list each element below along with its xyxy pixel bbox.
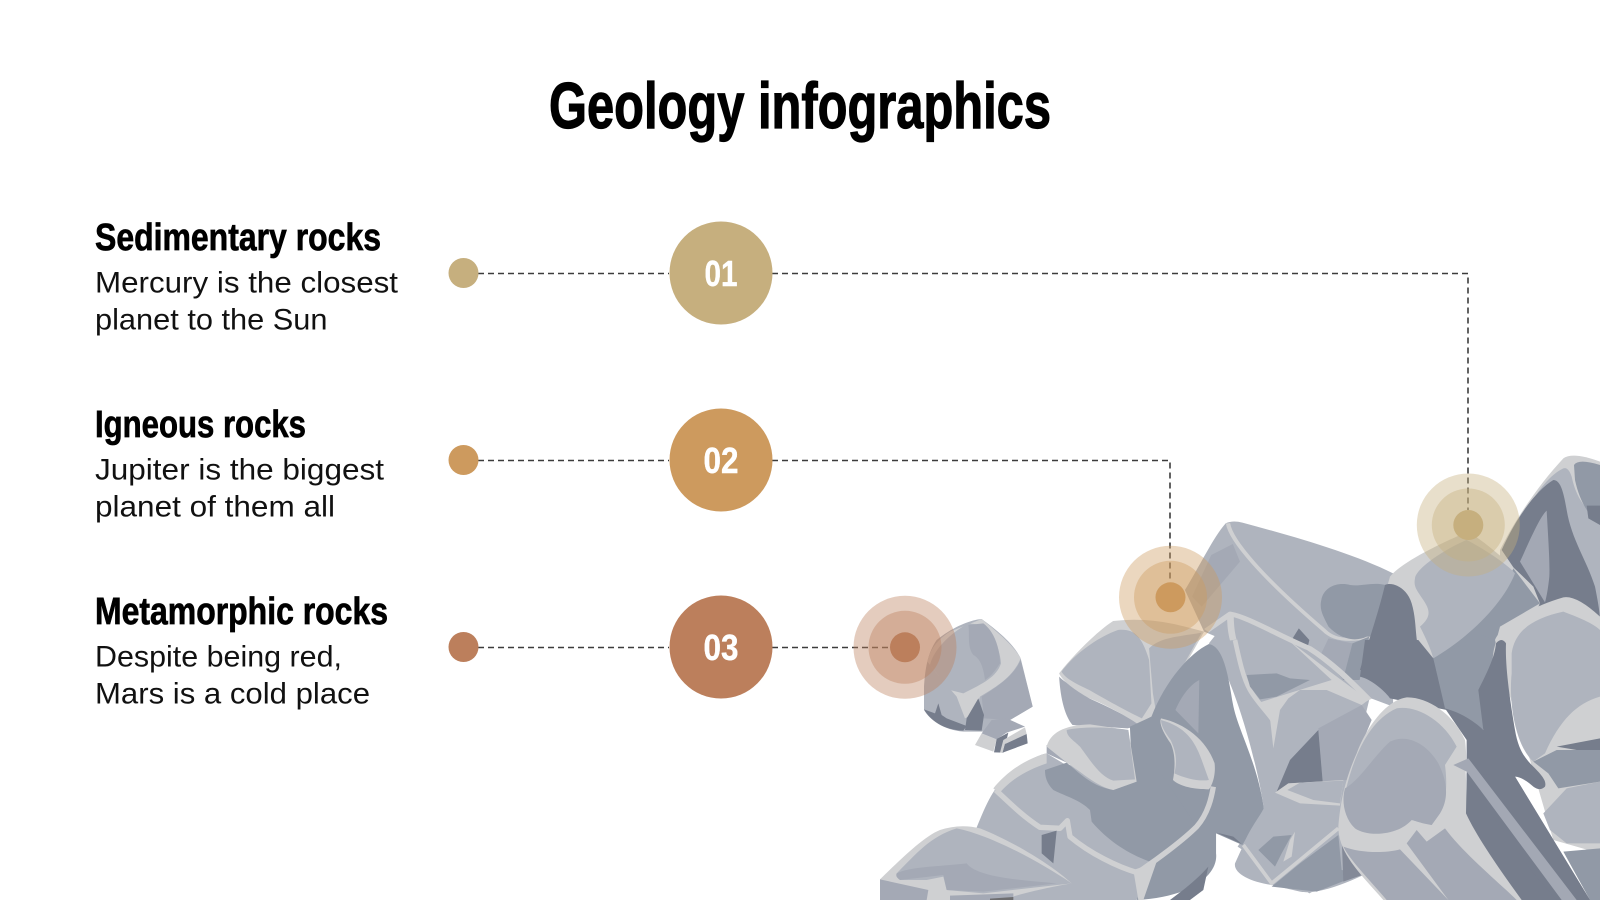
dot: 02 — [448, 445, 478, 475]
central rock facets — [1217, 640, 1372, 892]
description: metamorphic rocks — [95, 640, 370, 710]
connector: 03 — [478, 646, 890, 648]
number badge: 01 — [670, 222, 772, 324]
central rock and left shoulder rock — [1059, 613, 1369, 900]
description: sedimentary rocks: planet to the Sun — [95, 304, 328, 336]
description: metamorphic rocks: Despite being red, — [95, 640, 342, 674]
heading: igneous rocks: Igneous rocks — [95, 404, 306, 446]
dot: 01 — [448, 258, 478, 288]
target marker: 01 — [1417, 474, 1520, 576]
right petal facet — [1160, 718, 1215, 789]
description: metamorphic rocks: Mars is a cold place — [95, 678, 370, 710]
block: metamorphic rocks — [95, 591, 388, 710]
centre right rock under target one — [1360, 532, 1540, 670]
top centre rock — [1185, 521, 1393, 707]
number badge: 02: 02 — [704, 440, 738, 481]
heading: metamorphic rocks: Metamorphic rocks — [95, 591, 388, 633]
description: sedimentary rocks: Mercury is the closest — [95, 266, 399, 300]
description: igneous rocks — [95, 454, 385, 524]
block: igneous rocks — [95, 404, 385, 524]
target marker: 02 — [1119, 546, 1222, 649]
description: igneous rocks: Jupiter is the biggest — [95, 454, 385, 486]
front left body rock — [977, 724, 1213, 900]
number badge: 01: 01 — [704, 253, 738, 294]
block: sedimentary rocks — [95, 217, 399, 336]
target marker: 03 — [854, 596, 956, 699]
rock pile illustration — [880, 456, 1600, 900]
connector: 02 — [478, 460, 1170, 582]
heading: sedimentary rocks: Sedimentary rocks — [95, 217, 381, 259]
description: igneous rocks: planet of them all — [95, 490, 335, 524]
small boulder — [924, 619, 1033, 732]
bottom left rock — [880, 826, 1072, 900]
deep shadow and right foreground rock — [1360, 597, 1600, 900]
description: sedimentary rocks — [95, 266, 399, 336]
connector: 01 — [478, 274, 1468, 510]
number badge: 03 — [670, 596, 772, 698]
number badge: 02 — [670, 408, 772, 512]
small stone — [975, 718, 1028, 753]
dot: 03 — [448, 632, 478, 662]
number badge: 03: 03 — [704, 627, 738, 668]
far right rear rock — [1500, 456, 1600, 670]
title: Geology infographics — [549, 69, 1051, 142]
front large rock — [1338, 697, 1590, 900]
